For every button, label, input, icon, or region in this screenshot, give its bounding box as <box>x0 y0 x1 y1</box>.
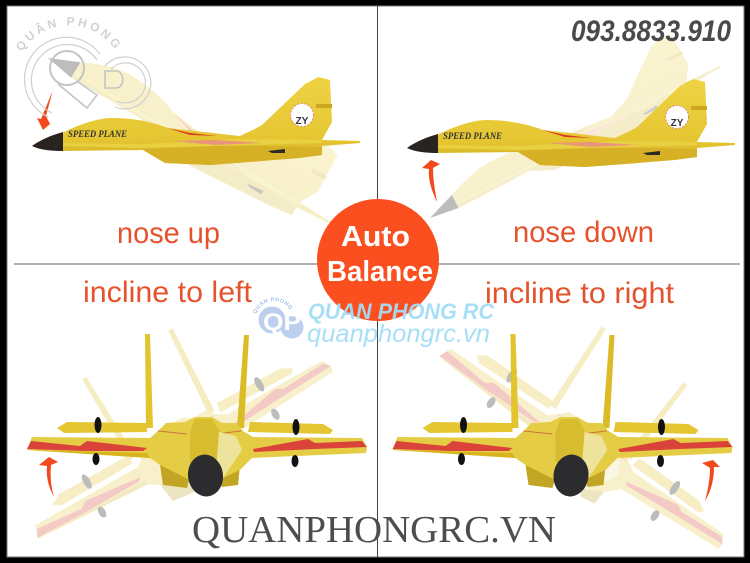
label: incline to left: incline to left <box>83 276 253 309</box>
watermark: QP logo top left <box>16 16 152 118</box>
ghost plane: nose lowered <box>404 19 729 232</box>
website footer: QUANPHONGRC.VN <box>192 509 556 551</box>
watermark: brand text: QUAN PHONG RC <box>308 299 495 324</box>
watermark: centre logo <box>253 297 304 338</box>
label: nose down: nose down <box>513 216 654 249</box>
yellow plane: level: ZY <box>296 116 309 127</box>
badge: auto balance: Auto <box>341 221 410 253</box>
phone number: 093.8833.910 <box>571 15 731 48</box>
badge: auto balance: Balance <box>327 256 433 288</box>
yellow plane: level: ZY <box>671 118 684 129</box>
panel: incline to right <box>392 260 750 563</box>
yellow plane: level <box>32 77 360 165</box>
yellow plane: level: SPEED PLANE <box>443 132 502 142</box>
label: nose up: nose up <box>117 217 220 250</box>
panel: incline to left <box>0 268 367 563</box>
watermark: brand text <box>307 299 495 348</box>
label: incline to right: incline to right <box>485 277 675 310</box>
yellow plane: level <box>407 79 735 167</box>
watermark: centre logo: QUAN PHONG <box>253 297 292 314</box>
badge: auto balance <box>317 199 439 321</box>
arrow: up to nose <box>422 160 440 202</box>
watermark: brand text: quanphongrc.vn <box>307 320 490 348</box>
ghost plane: rolled right <box>418 260 750 563</box>
ghost plane: rolled left <box>0 268 351 563</box>
yellow plane: level: SPEED PLANE <box>68 130 127 140</box>
panel: nose up <box>32 0 365 250</box>
ghost plane: nose raised <box>38 0 365 243</box>
yellow plane: front view <box>27 334 367 499</box>
watermark: QP logo top left: QUÂN PHONG <box>16 16 120 50</box>
yellow plane: front view <box>392 334 732 499</box>
arrow: down to nose <box>37 82 55 130</box>
panel: nose down <box>404 19 735 249</box>
watermark: centre logo: QP <box>263 309 301 336</box>
arrow: wing up <box>702 460 720 501</box>
arrow: wing up <box>39 457 58 497</box>
